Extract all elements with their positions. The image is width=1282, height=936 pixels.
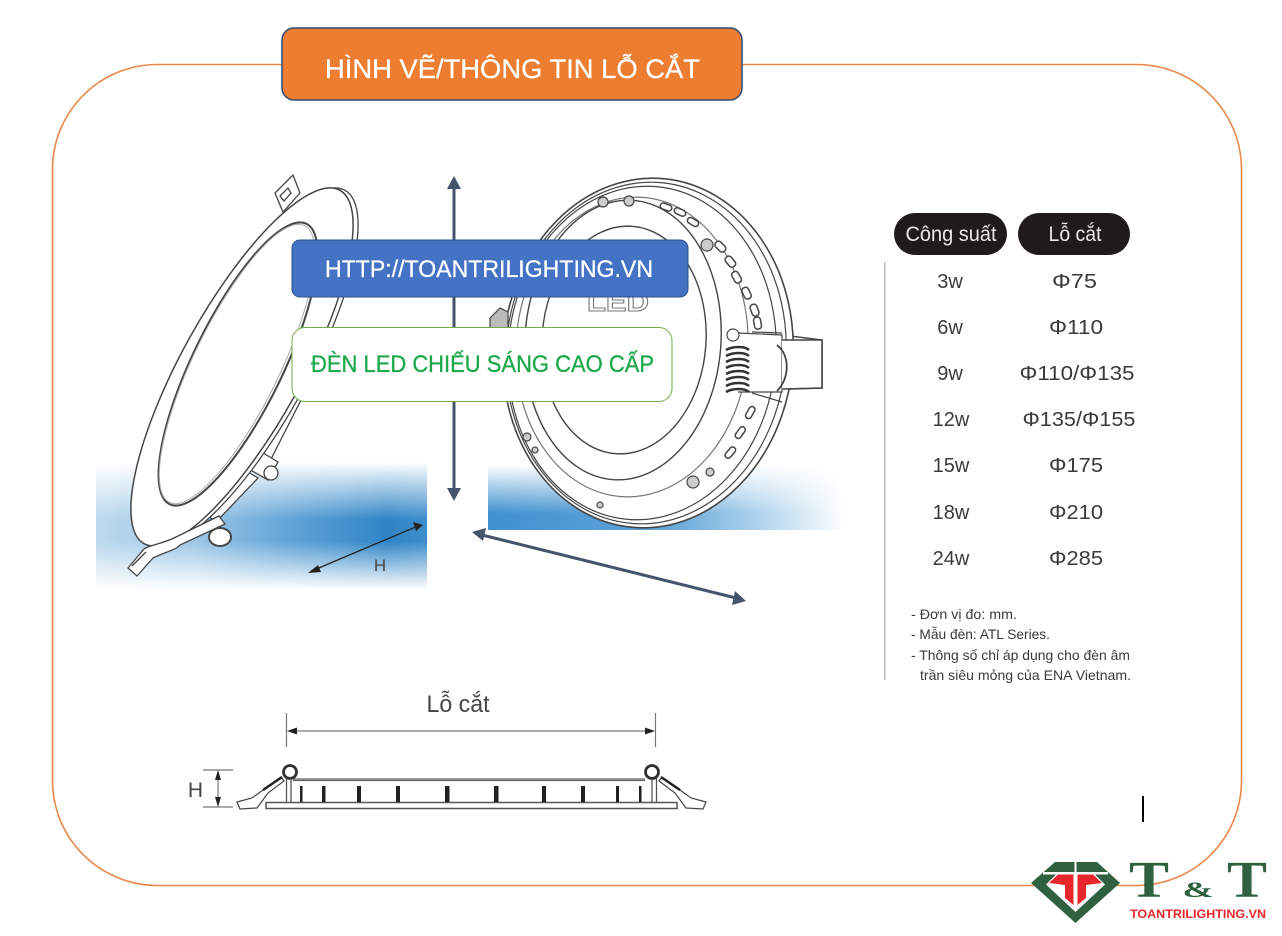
table rows: 18w (933, 502, 970, 524)
foot spring clip of left lamp (128, 516, 225, 576)
label: H on left lamp: H (374, 556, 386, 575)
fins (300, 786, 642, 802)
table rows: 3w (937, 271, 963, 293)
left tab (490, 308, 508, 328)
table rows: 6w (937, 317, 963, 339)
title banner (282, 28, 742, 100)
table rows: 15w (933, 455, 970, 477)
logo: T & T Toan Tri Lighting: & (1182, 877, 1214, 902)
banner: website link (292, 240, 688, 297)
dimension line: cut-out (286, 713, 656, 747)
table rows: 12w (933, 409, 970, 431)
table header: cut-out (1018, 213, 1130, 255)
notes under table: - Mẫu đèn: ATL Series. (911, 626, 1050, 642)
table rows: Φ210 (1049, 502, 1103, 524)
logo: T & T Toan Tri Lighting (1031, 852, 1267, 923)
table rows (933, 271, 1136, 570)
spring coils (284, 766, 658, 778)
outer rim of right lamp (488, 166, 808, 540)
arrow: vertical double arrow (447, 176, 461, 501)
inner ring of left lamp (129, 204, 347, 524)
fin band line (506, 189, 758, 505)
notes under table: - Thông số chỉ áp dụng cho đèn âm (911, 647, 1130, 663)
notes under table: trần siêu mỏng của ENA Vietnam. (920, 667, 1131, 683)
table header: power (894, 213, 1007, 255)
dimension: H: H (188, 779, 203, 802)
blue glow: right lamp background (488, 465, 846, 530)
table rows: 9w (937, 363, 963, 385)
table rows: Φ135/Φ155 (1022, 409, 1136, 431)
table rows: Φ110 (1049, 317, 1103, 339)
banner: product tagline (292, 328, 672, 402)
logo diamond (1031, 862, 1120, 923)
posts (286, 776, 656, 802)
table rule (884, 262, 886, 680)
table rows: Φ110/Φ135 (1020, 363, 1134, 385)
outer rim of left lamp (97, 161, 397, 573)
table: power and cut-out size (884, 213, 1136, 680)
base plate (266, 802, 677, 808)
logo lettering: T (1129, 852, 1169, 909)
arrow: diagonal double arrow (472, 528, 746, 605)
banner: product tagline: ĐÈN LED CHIẾU SÁNG CAO CẤP (311, 350, 654, 378)
logo website: TOANTRILIGHTING.VN (1130, 909, 1266, 921)
black tick mark (1142, 796, 1144, 822)
spring arms (237, 777, 706, 809)
table header: cut-out: Lỗ cắt (1048, 223, 1102, 246)
dimension: H (188, 770, 233, 807)
icon: left lamp perspective drawing (92, 161, 397, 576)
table rows: 24w (933, 548, 970, 570)
LED mark: LED (587, 287, 649, 317)
notes under table (911, 606, 1131, 683)
title banner: HÌNH VẼ/THÔNG TIN LỖ CẮT (325, 53, 700, 84)
blue glow: left lamp background (96, 460, 427, 590)
lamp body top (293, 779, 645, 780)
logo: T & T Toan Tri Lighting: T (1227, 852, 1267, 909)
icon: right lamp rear drawing (488, 166, 822, 540)
back clips and tabs of left lamp (206, 175, 355, 546)
arrow: H dimension on left lamp (308, 522, 423, 573)
banner: website link: HTTP://TOANTRILIGHTING.VN (325, 256, 653, 283)
heat-sink fins (659, 202, 762, 460)
table rows: Φ75 (1052, 271, 1097, 293)
table header: power: Công suất (906, 223, 997, 246)
table rows: Φ175 (1049, 455, 1103, 477)
notes under table: - Đơn vị đo: mm. (911, 606, 1017, 622)
diagram: side cross-section with dimensions (188, 691, 706, 809)
spring coil and clip front (726, 329, 822, 402)
spring clip box (738, 333, 822, 391)
label: cut-out dimension: Lỗ cắt (426, 691, 490, 718)
mounting screws (523, 196, 714, 508)
inner rings of right lamp (515, 194, 731, 486)
table rows: Φ285 (1049, 548, 1103, 570)
